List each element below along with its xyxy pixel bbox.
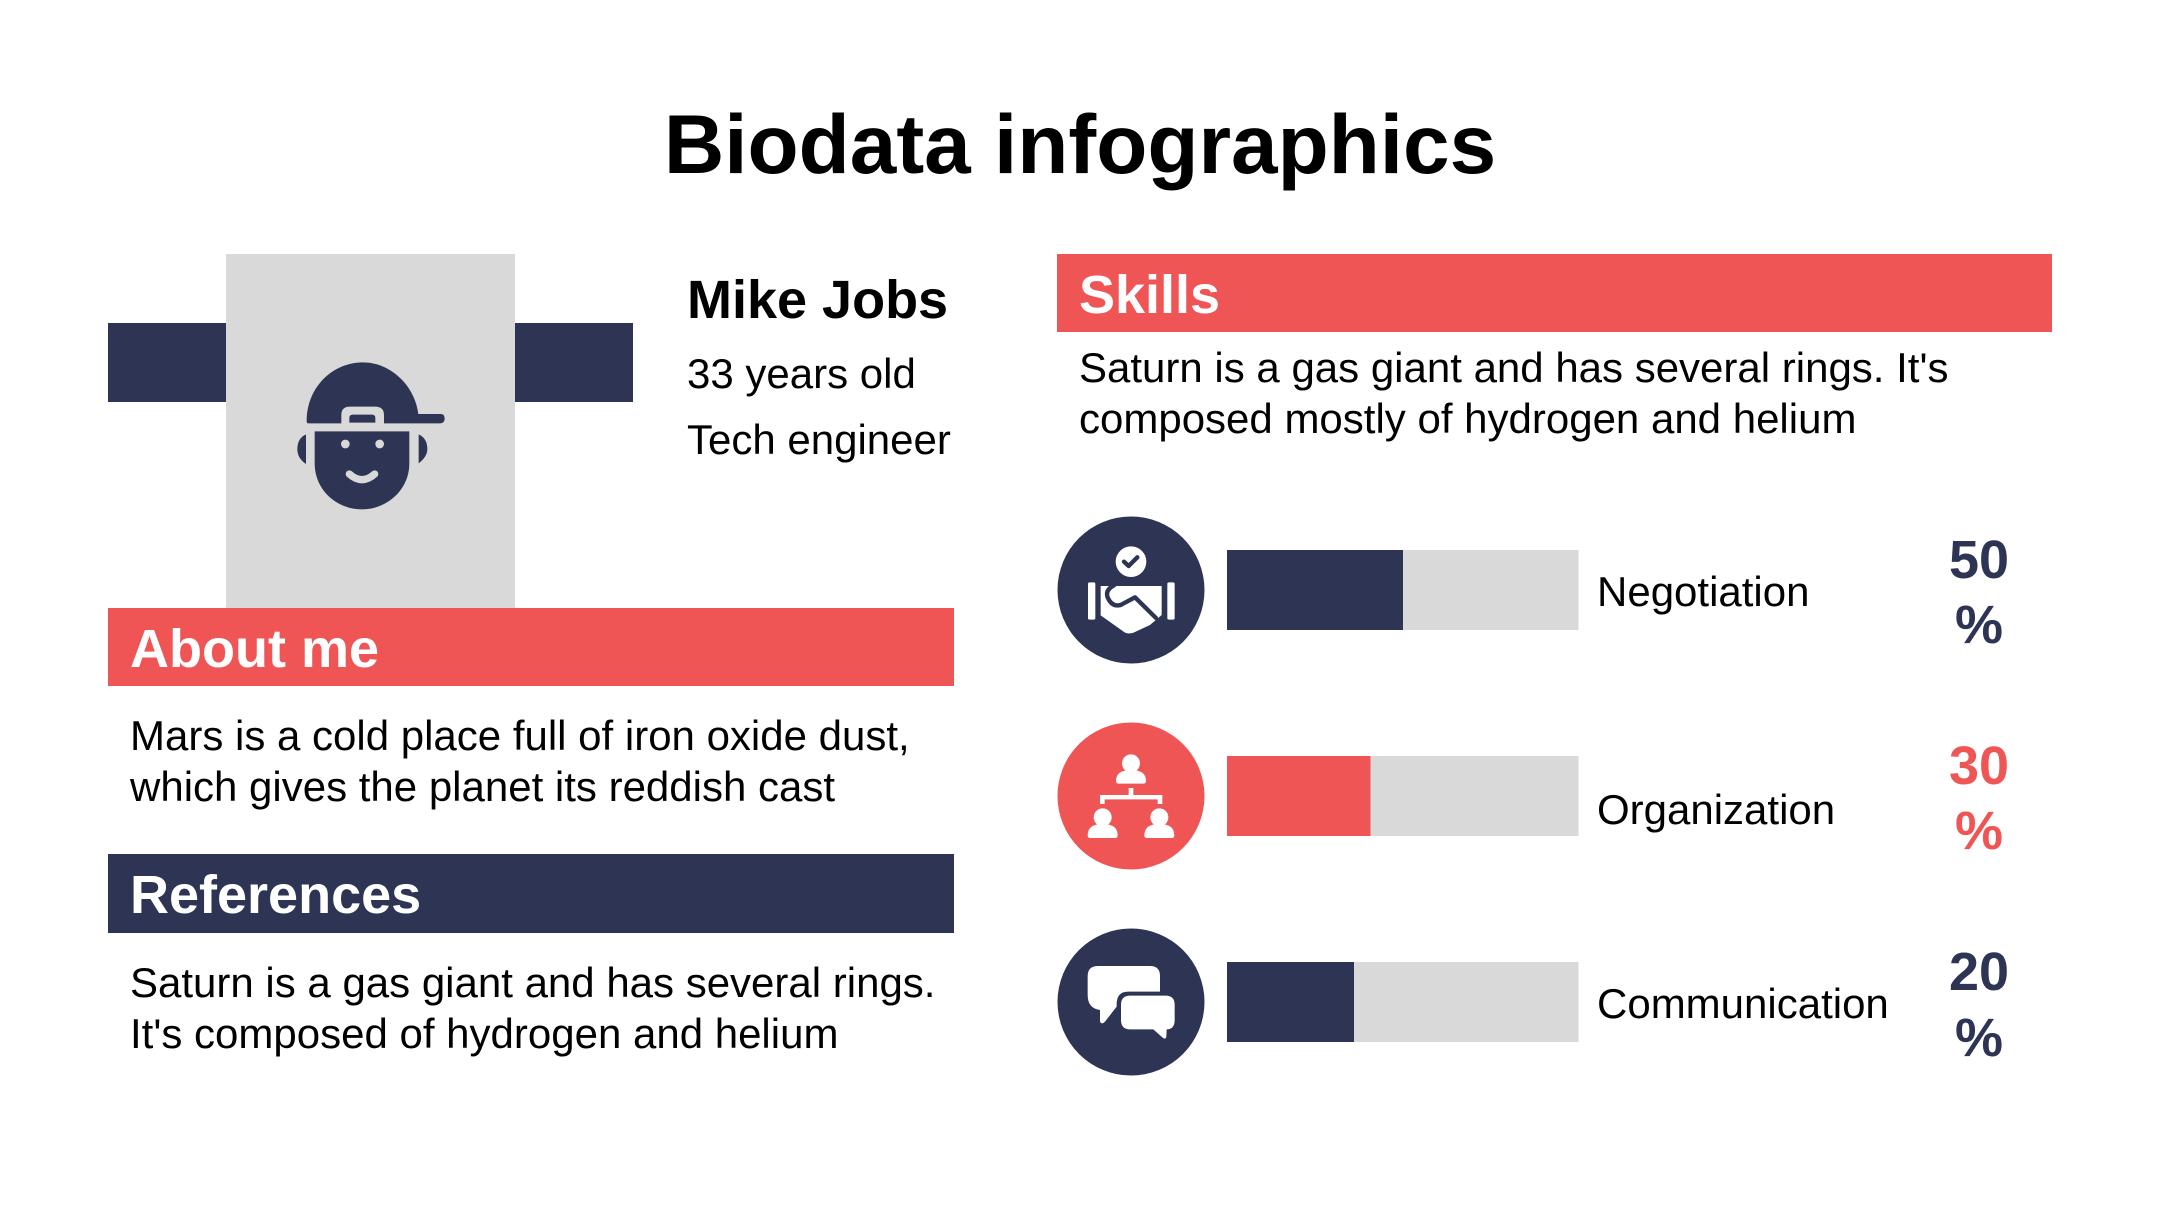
value: 20%: % [1955, 1008, 2003, 1068]
value: 20% [1949, 942, 2009, 1068]
panel: skills [1057, 254, 2052, 1076]
value: 50%: 50 [1949, 530, 2009, 590]
skill row: communication [1058, 928, 2009, 1076]
text: about me: which gives the planet its reddish cast [129, 763, 835, 810]
skill row: negotiation [1058, 516, 2009, 664]
heading: references [108, 854, 954, 933]
bar: communication 20% [1227, 962, 1578, 1042]
bar: negotiation 50% [1227, 550, 1578, 630]
portrait panel [226, 254, 515, 608]
label: organization: Organization [1597, 786, 1835, 833]
heading: references: References [130, 865, 421, 925]
text: skills: Saturn is a gas giant and has several rings. It's [1079, 344, 1948, 391]
title: Biodata infographics [664, 97, 1496, 191]
value: 30% [1949, 736, 2009, 861]
text: about me: Mars is a cold place full of iron oxide dust, [130, 712, 910, 759]
icon: handshake [1058, 516, 1204, 664]
heading: about me: About me [130, 619, 379, 679]
name and role: Tech engineer [687, 416, 951, 463]
skill row: organization [1058, 722, 2009, 870]
text: references [130, 959, 935, 1057]
icon: boy with cap [297, 362, 445, 509]
name and role: Mike Jobs [687, 270, 948, 330]
value: 20%: 20 [1949, 942, 2009, 1002]
name and role [687, 270, 951, 463]
name and role: 33 years old [687, 350, 916, 397]
text: about me [129, 712, 910, 810]
text: skills [1079, 344, 1948, 442]
heading: about me [108, 608, 954, 686]
heading: skills: Skills [1079, 265, 1220, 325]
panel: about me [108, 608, 954, 810]
bar: organization 30% [1227, 756, 1578, 836]
panel: references [108, 854, 954, 1057]
text: references: It's composed of hydrogen and helium [130, 1010, 838, 1057]
navy band behind portrait [108, 323, 633, 402]
heading: skills [1057, 254, 2052, 332]
icon: speech bubbles [1058, 928, 1204, 1076]
text: references: Saturn is a gas giant and has several rings. [130, 959, 935, 1006]
label: communication: Communication [1597, 980, 1889, 1027]
text: skills: composed mostly of hydrogen and helium [1079, 395, 1856, 442]
value: 30%: % [1955, 801, 2003, 861]
icon: org chart [1058, 722, 1204, 870]
label: negotiation: Negotiation [1597, 568, 1809, 615]
value: 50% [1949, 530, 2009, 655]
value: 50%: % [1955, 595, 2003, 655]
panel: profile [108, 254, 951, 608]
value: 30%: 30 [1949, 736, 2009, 796]
